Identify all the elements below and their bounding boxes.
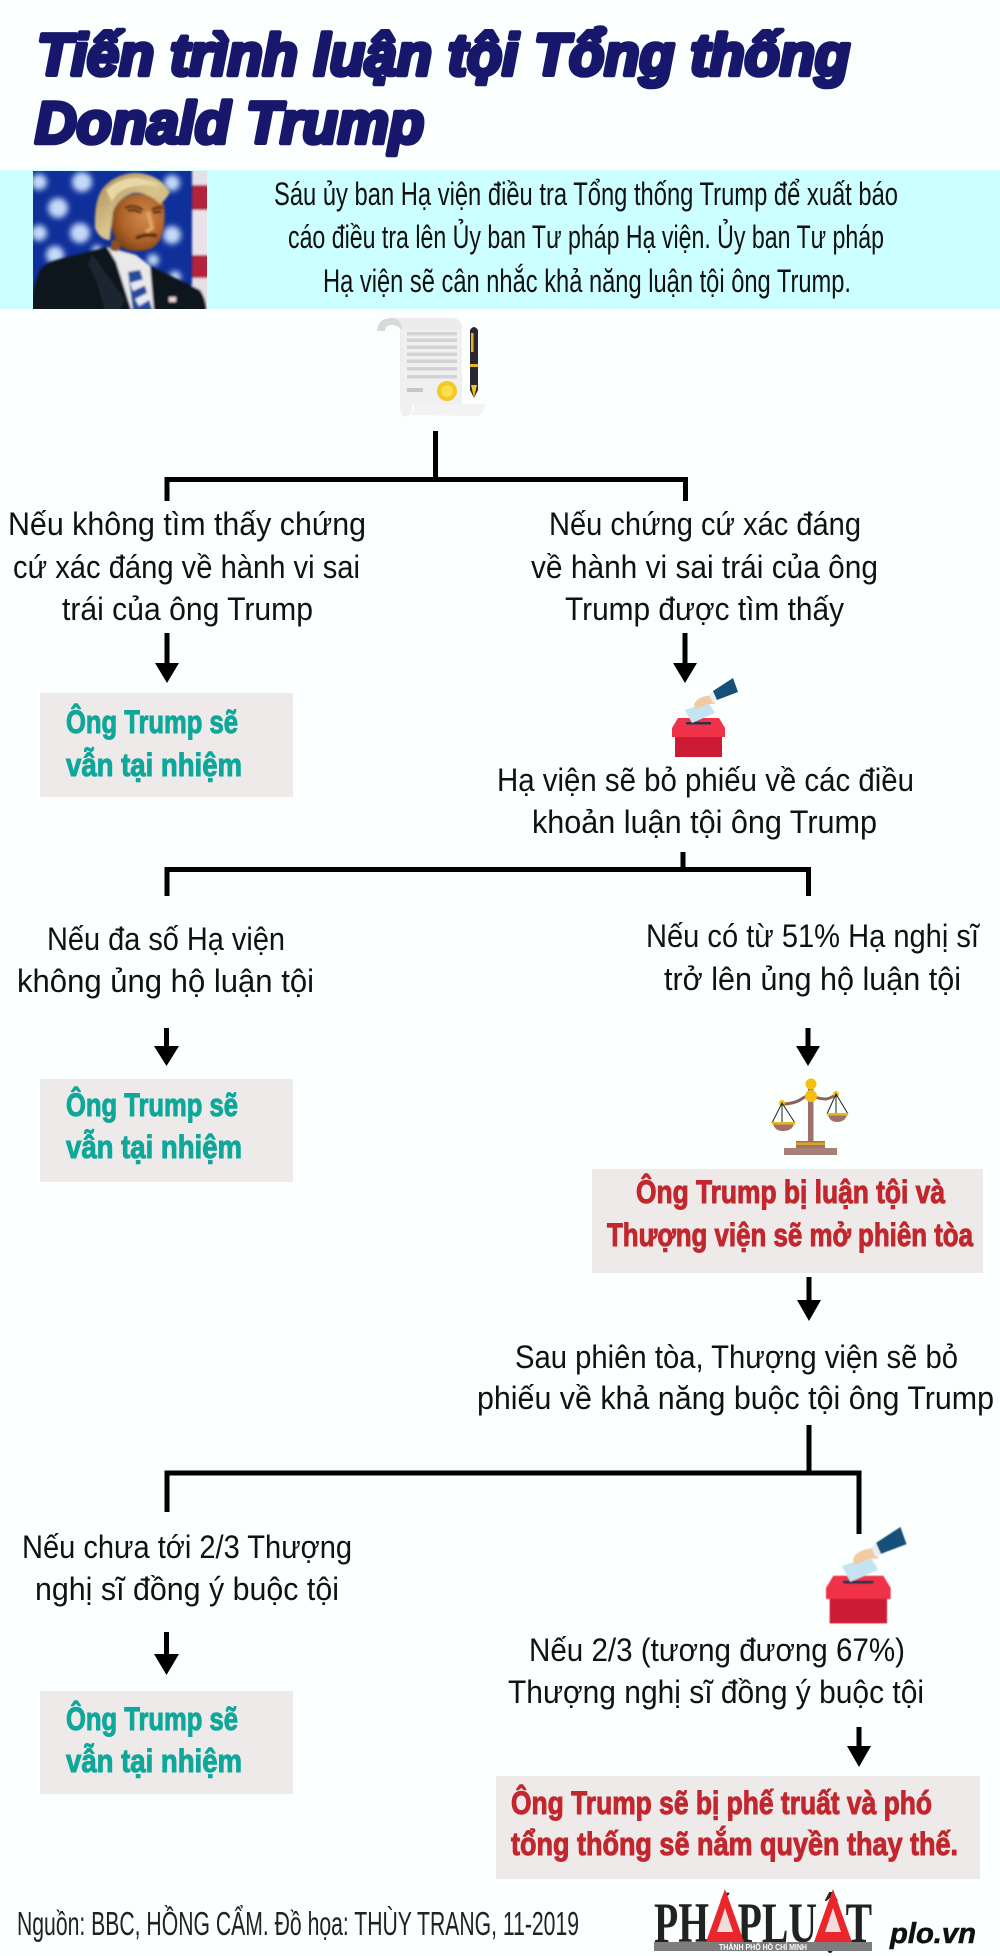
outcome box: remains in office 1: [40, 693, 293, 797]
text: House vote: khoản luận tội ông Trump: [532, 804, 877, 840]
outcome box: remains in office 1: Ông Trump sẽ: [66, 704, 238, 740]
outcome box: remains in office 2: [40, 1079, 293, 1182]
text: Senate vote: Sau phiên tòa, Thượng viện sẽ bỏ: [515, 1339, 958, 1375]
arrow: [797, 1277, 821, 1321]
connector: Senate vote outcomes: [167, 1425, 859, 1534]
outcome box: remains in office 3: Ông Trump sẽ: [66, 1701, 238, 1737]
branch text: evidence found: Trump được tìm thấy: [565, 591, 844, 627]
branch text: 51 percent majority: [646, 918, 981, 997]
source line: Nguồn: BBC, HỒNG CẨM. Đồ họa: THÙY TRANG, 11-2019: [17, 1905, 579, 1942]
arrow: [155, 633, 179, 683]
branch text: evidence found: [531, 506, 878, 627]
branch text: two thirds: [508, 1632, 924, 1710]
branch text: two thirds: Nếu 2/3 (tương đương 67%): [529, 1632, 905, 1668]
icon: ballot box 2: [826, 1527, 907, 1623]
arrow: [154, 1632, 179, 1675]
arrow: [154, 1028, 179, 1066]
arrow: [796, 1028, 820, 1066]
icon: document and pen: [377, 318, 485, 416]
text: House vote: [497, 762, 914, 840]
outcome box: impeached, Senate trial: Ông Trump bị luận tội và: [636, 1174, 945, 1210]
text: House vote: Hạ viện sẽ bỏ phiếu về các điều: [497, 762, 914, 798]
icon: scales of justice: [772, 1078, 848, 1155]
outcome box: remains in office 2: vẫn tại nhiệm: [66, 1129, 242, 1165]
branch text: two thirds: Thượng nghị sĩ đồng ý buộc tội: [508, 1674, 924, 1710]
intro text: [274, 176, 898, 299]
branch text: no House majority: [17, 921, 314, 999]
connector: report to two outcomes: [167, 431, 686, 501]
outcome box: remains in office 3: [40, 1691, 293, 1794]
outcome box: remains in office 2: Ông Trump sẽ: [66, 1087, 238, 1123]
title: [35, 23, 850, 156]
branch text: no House majority: Nếu đa số Hạ viện: [47, 921, 285, 957]
connector: House vote outcomes: [167, 852, 808, 896]
title: Donald Trump: [35, 91, 424, 156]
branch text: evidence found: về hành vi sai trái của ông: [531, 549, 878, 585]
branch text: no evidence: Nếu không tìm thấy chứng: [8, 506, 366, 542]
icon: ballot box: [672, 678, 738, 757]
outcome box: removed from office: [496, 1776, 980, 1879]
branch text: no evidence: trái của ông Trump: [62, 591, 313, 627]
outcome box: remains in office 1: vẫn tại nhiệm: [66, 747, 242, 783]
branch text: no evidence: [8, 506, 366, 627]
branch text: under two thirds: [22, 1529, 352, 1607]
outcome box: remains in office 3: vẫn tại nhiệm: [66, 1743, 242, 1779]
panel: intro band: [0, 165, 1000, 313]
branch text: 51 percent majority: trở lên ủng hộ luận tội: [664, 961, 961, 997]
logo: Pháp Luật: PHÁPLUẬT: [654, 1892, 872, 1955]
outcome box: impeached, Senate trial: [592, 1169, 983, 1273]
logo: Pháp Luật: THÀNH PHỐ HỒ CHÍ MINH: [719, 1942, 807, 1952]
arrow: [673, 633, 697, 683]
photo: Donald Trump: [33, 171, 207, 309]
branch text: no House majority: không ủng hộ luận tội: [17, 963, 314, 999]
logo: Pháp Luật: [654, 1889, 872, 1955]
title: Tiến trình luận tội Tổng thống: [37, 23, 850, 88]
branch text: evidence found: Nếu chứng cứ xác đáng: [549, 506, 861, 542]
branch text: under two thirds: nghị sĩ đồng ý buộc tội: [35, 1571, 339, 1607]
text: Senate vote: [477, 1339, 994, 1416]
branch text: no evidence: cứ xác đáng về hành vi sai: [13, 549, 360, 585]
arrow: [847, 1727, 871, 1767]
logo: plo.vn: plo.vn: [889, 1918, 976, 1950]
branch text: under two thirds: Nếu chưa tới 2/3 Thượng: [22, 1529, 352, 1565]
